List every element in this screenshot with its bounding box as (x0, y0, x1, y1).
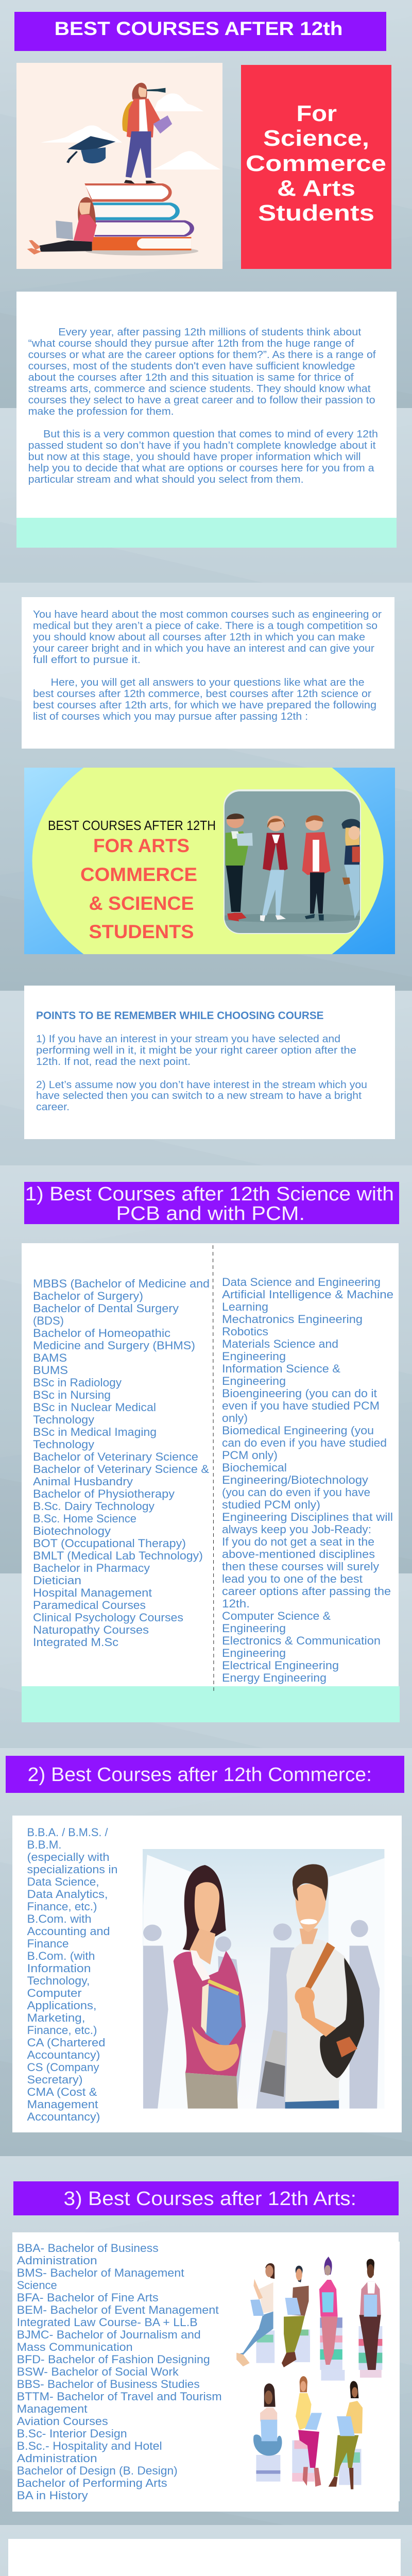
panel: closing message (8, 2539, 401, 2576)
banner subheading: STUDENTS (89, 921, 194, 942)
list: PCM courses: Computer Science & (222, 1609, 331, 1622)
list: arts courses: BSW- Bachelor of Social Work (17, 2365, 179, 2378)
list: PCB courses: Bachelor of Surgery) (33, 1290, 143, 1302)
list: PCM courses: Information Science & (222, 1362, 340, 1375)
list: commerce courses: B.Com. with (27, 1912, 92, 1925)
paragraph 1: make the profession for them. (28, 406, 174, 417)
panel: science course lists (22, 1243, 400, 1722)
paragraph 1: courses, most of the students don't even have sufficient knowledge (28, 361, 355, 372)
paragraph 1 (28, 327, 376, 417)
student 2 (260, 816, 288, 921)
list: PCM courses: Biomedical Engineering (you (222, 1424, 374, 1437)
list: PCM courses: 12th. (222, 1597, 250, 1610)
list: arts courses: BEM- Bachelor of Event Management (17, 2303, 219, 2316)
list: PCB courses: B.Sc. Dairy Technology (33, 1500, 154, 1513)
panel: common courses text (22, 597, 394, 749)
paragraph 1: your career bright and in which you have an interest and can give your (33, 643, 374, 654)
list: PCM courses: PCM only) (222, 1449, 278, 1462)
list: arts courses: BBA- Bachelor of Business (17, 2242, 159, 2255)
paragraph 1: about the courses after 12th and this situation is same for thrice of (28, 372, 354, 383)
banner subheading: & SCIENCE (89, 893, 194, 914)
point 1: 1) If you have an interest in your stream you have selected and (36, 1033, 340, 1045)
list: PCB courses: Integrated M.Sc (33, 1636, 118, 1649)
panel: points to remember (24, 986, 395, 1139)
heading: arts courses: 3) Best Courses after 12th Arts: (64, 2188, 356, 2210)
list: commerce courses: Data Analytics, (27, 1888, 108, 1901)
list: PCB courses: Bachelor of Veterinary Science & (33, 1463, 209, 1476)
paragraph 1 (33, 609, 382, 666)
heading: science courses (24, 1182, 399, 1225)
list: commerce courses: Finance, etc.) (27, 2024, 97, 2037)
student 3 (302, 816, 331, 921)
list: commerce courses: Accountancy) (27, 2110, 100, 2123)
list: PCM courses: Electronics & Communication (222, 1634, 381, 1647)
title banner (14, 12, 386, 51)
boy with backpack (260, 1864, 364, 2109)
list: commerce courses: Accountancy) (27, 2048, 100, 2061)
list: commerce courses: specializations in (27, 1863, 117, 1876)
list: commerce courses: Computer (27, 1987, 81, 1999)
panel: yellow circle banner (24, 768, 395, 954)
list: PCB courses (33, 1277, 210, 1649)
illustration: students on book stacks, bottom row (253, 2370, 382, 2489)
list: PCB courses: Bachelor of Homeopathic (33, 1327, 170, 1340)
callout text: Students (258, 200, 374, 226)
paragraph 2: passed student so don’t have if you hadn’t complete knowledge about it (28, 440, 376, 451)
list: arts courses: Science (17, 2279, 57, 2292)
list: PCM courses: Engineering Disciplines that will (222, 1511, 393, 1523)
paragraph 2: best courses after 12th commerce, best courses after 12th science or (33, 688, 371, 700)
list: commerce courses: B.B.M. (27, 1838, 62, 1851)
list: commerce courses: Information (27, 1962, 91, 1975)
point 1: performing well in it, it might be your right career option after the (36, 1045, 356, 1056)
callout text (246, 101, 386, 226)
list: PCB courses: BSc in Nuclear Medical (33, 1401, 156, 1414)
list: PCM courses: Engineering (222, 1647, 286, 1659)
list: arts courses: BFA- Bachelor of Fine Arts (17, 2291, 159, 2304)
list: arts courses: BBS- Bachelor of Business Studies (17, 2378, 200, 2391)
list: commerce courses: Finance, etc.) (27, 1900, 97, 1913)
paragraph 1: streams arts, commerce and science students. They should know what (28, 383, 371, 395)
panel: commerce courses (12, 1816, 402, 2132)
list: PCB courses: BSc in Nursing (33, 1388, 111, 1401)
list: PCM courses: Learning (222, 1300, 268, 1313)
point 2: career. (36, 1101, 70, 1113)
paragraph 2: list of courses which you may pursue after passing 12th : (33, 711, 308, 722)
paragraph 1: You have heard about the most common courses such as engineering or (33, 609, 382, 620)
list: arts courses: Mass Communication (17, 2341, 133, 2353)
list: commerce courses (27, 1826, 117, 2123)
list: arts courses: BJMC- Bachelor of Journalism and (17, 2328, 201, 2341)
callout text: Science, (263, 126, 369, 151)
paragraph 1: courses they select to have a great career and to follow their passion to (28, 395, 375, 406)
list: PCB courses: (BDS) (33, 1314, 64, 1327)
list: arts courses: Management (17, 2402, 88, 2415)
point 1 (36, 1033, 356, 1067)
list: arts courses (17, 2242, 222, 2502)
point 2: have selected then you can switch to a new stream to have a bright (36, 1090, 362, 1101)
list: PCM courses: Biochemical (222, 1461, 287, 1474)
paragraph 1: Every year, after passing 12th millions of students think about (58, 327, 362, 338)
heading: arts courses (13, 2181, 399, 2215)
list: commerce courses: Secretary) (27, 2073, 82, 2086)
photo frame: group of four students (224, 789, 361, 934)
paragraph 2 (28, 429, 378, 485)
list: commerce courses: Management (27, 2098, 98, 2111)
list: PCB courses: Technology (33, 1413, 94, 1426)
list: PCM courses: Artificial Intelligence & Machine (222, 1288, 393, 1301)
list: commerce courses: B.Com. (with (27, 1950, 95, 1962)
paragraph 1: medical but they aren’t a piece of cake. There is a tough competition so (33, 620, 377, 632)
panel: intro illustration (16, 63, 222, 269)
list: PCM courses: Materials Science and (222, 1337, 338, 1350)
illustration: two students (143, 1849, 384, 2109)
list: PCM courses: even if you have studied PCM (222, 1399, 380, 1412)
paragraph 2: help you to decide that what are options or courses here for you from a (28, 463, 375, 474)
student 1 (226, 814, 253, 921)
paragraph 2: Here, you will get all answers to your questions like what are the (50, 677, 365, 688)
banner subheading: COMMERCE (80, 864, 197, 885)
panel: arts courses (12, 2232, 400, 2512)
list: commerce courses: Applications, (27, 1999, 97, 2012)
panel: introduction text (16, 292, 397, 548)
paragraph 1: “what course should they pursue after 12th from the huge range of (28, 338, 354, 349)
list: PCB courses: B.Sc. Home Science (33, 1512, 136, 1525)
list: arts courses: BFD- Bachelor of Fashion Designing (17, 2353, 210, 2366)
list: commerce courses: Marketing, (27, 2011, 85, 2024)
heading: science courses: 1) Best Courses after 12th Science with (25, 1183, 394, 1205)
list: PCM courses: Mechatronics Engineering (222, 1313, 363, 1326)
list: arts courses: Integrated Law Course- BA + LL.B (17, 2316, 198, 2329)
list: PCM courses: Engineering (222, 1622, 286, 1635)
list: PCB courses: BOT (Occupational Therapy) (33, 1537, 186, 1550)
point 1: 12th. If not, read the next point. (36, 1056, 191, 1067)
list: PCB courses: Technology (33, 1438, 94, 1451)
list: PCM courses: can do even if you have studied (222, 1436, 387, 1449)
list: arts courses: Administration (17, 2452, 97, 2465)
list: PCB courses: Hospital Management (33, 1586, 152, 1599)
list: commerce courses: Finance (27, 1937, 69, 1950)
list: PCM courses (222, 1276, 393, 1684)
list: arts courses: BMS- Bachelor of Management (17, 2266, 184, 2279)
callout text: For (297, 101, 337, 126)
list: PCM courses: above-mentioned disciplines (222, 1548, 375, 1561)
list: PCB courses: Medicine and Surgery (BHMS) (33, 1339, 195, 1352)
list: PCB courses: Dietician (33, 1574, 81, 1587)
list: commerce courses: (especially with (27, 1851, 109, 1863)
callout text: Commerce (246, 151, 386, 176)
list: PCB courses: Bachelor of Physiotherapy (33, 1487, 175, 1500)
callout text: & Arts (277, 176, 355, 201)
list: commerce courses: CA (Chartered (27, 2036, 105, 2049)
title text: BEST COURSES AFTER 12th (55, 18, 343, 39)
list: arts courses: B.Sc- Interior Design (17, 2427, 127, 2440)
list: PCM courses: studied PCM only) (222, 1498, 320, 1511)
list: PCB courses: BAMS (33, 1351, 67, 1364)
paragraph 2 (33, 677, 376, 722)
paragraph 1: you should know about all courses after 12th in which you can make (33, 632, 365, 643)
point 2 (36, 1079, 367, 1113)
list: commerce courses: Accounting and (27, 1925, 110, 1938)
list: PCM courses: Engineering (222, 1375, 286, 1387)
list: commerce courses: Technology, (27, 1974, 90, 1987)
heading: commerce courses (6, 1756, 404, 1793)
list: PCM courses: always keep you Job-Ready: (222, 1523, 371, 1536)
list: arts courses: Administration (17, 2254, 97, 2267)
list: PCB courses: BMLT (Medical Lab Technology) (33, 1549, 203, 1562)
list: arts courses: Bachelor of Design (B. Design) (17, 2464, 178, 2477)
student 4 (341, 819, 360, 919)
list: PCB courses: Biotechnology (33, 1524, 111, 1537)
list: PCM courses: Data Science and Engineering (222, 1276, 381, 1289)
banner heading: BEST COURSES AFTER 12TH (48, 818, 216, 833)
list: PCM courses: If you do not get a seat in the (222, 1535, 374, 1548)
list: arts courses: Bachelor of Performing Arts (17, 2477, 167, 2489)
illustration: students on book stacks, top row (236, 2257, 382, 2370)
list: PCB courses: Naturopathy Courses (33, 1623, 149, 1636)
list: PCB courses: BSc in Medical Imaging (33, 1426, 157, 1438)
list: arts courses: B.Sc.- Hospitality and Hotel (17, 2439, 162, 2452)
list: PCM courses: (you can do even if you have (222, 1486, 370, 1499)
paragraph 1: courses or what are the career options for them?”. As there is a range of (28, 349, 376, 361)
girl with notebook (174, 1865, 246, 2109)
paragraph 2: best courses after 12th arts, for which we have prepared the following (33, 700, 376, 711)
list: PCM courses: Electrical Engineering (222, 1659, 339, 1672)
list: arts courses: BA in History (17, 2489, 88, 2502)
heading: science courses: PCB and with PCM. (116, 1203, 305, 1225)
list: PCB courses: BSc in Radiology (33, 1376, 122, 1389)
list: PCM courses: Robotics (222, 1325, 268, 1338)
list: PCM courses: Engineering (222, 1350, 286, 1363)
paragraph 2: But this is a very common question that comes to mind of every 12th (43, 429, 378, 440)
list: PCB courses: Bachelor of Veterinary Science (33, 1450, 198, 1463)
list: PCB courses: Bachelor of Dental Surgery (33, 1302, 179, 1315)
paragraph 2: particular stream and what should you select from them. (28, 474, 304, 485)
list: commerce courses: CMA (Cost & (27, 2086, 97, 2098)
list: arts courses: Aviation Courses (17, 2415, 108, 2428)
list: commerce courses: Data Science, (27, 1875, 99, 1888)
list: PCM courses: then these courses will surely (222, 1560, 379, 1573)
list: PCB courses: Animal Husbandry (33, 1475, 133, 1488)
list: PCM courses: only) (222, 1412, 248, 1425)
points heading: POINTS TO BE REMEMBER WHILE CHOOSING COURSE (36, 1010, 323, 1022)
paragraph 1: full effort to pursue it. (33, 654, 141, 666)
list: commerce courses: B.B.A. / B.M.S. / (27, 1826, 108, 1839)
list: PCB courses: BUMS (33, 1364, 68, 1377)
point 2: 2) Let’s assume now you don’t have interest in the stream which you (36, 1079, 367, 1091)
list: PCB courses: Bachelor in Pharmacy (33, 1562, 150, 1574)
list: PCM courses: Engineering/Biotechnology (222, 1473, 368, 1486)
list: PCB courses: Paramedical Courses (33, 1599, 146, 1612)
banner subheading (80, 835, 197, 942)
list: PCM courses: career options after passing the (222, 1585, 391, 1598)
heading: commerce courses: 2) Best Courses after 12th Commerce: (28, 1764, 372, 1786)
list: PCB courses: MBBS (Bachelor of Medicine and (33, 1277, 210, 1290)
paragraph 2: but now at this stage, you should have proper information which will (28, 451, 361, 463)
list: commerce courses: CS (Company (27, 2061, 99, 2074)
list: PCM courses: Energy Engineering (222, 1671, 327, 1684)
banner subheading: FOR ARTS (93, 835, 190, 856)
list: PCB courses: Clinical Psychology Courses (33, 1611, 183, 1624)
list: PCM courses: Bioengineering (you can do it (222, 1387, 377, 1400)
list: arts courses: BTTM- Bachelor of Travel and Tourism (17, 2390, 222, 2403)
illustration: students on stacked books (27, 83, 221, 256)
list: PCM courses: lead you to one of the best (222, 1572, 363, 1585)
panel: audience callout (241, 65, 391, 269)
